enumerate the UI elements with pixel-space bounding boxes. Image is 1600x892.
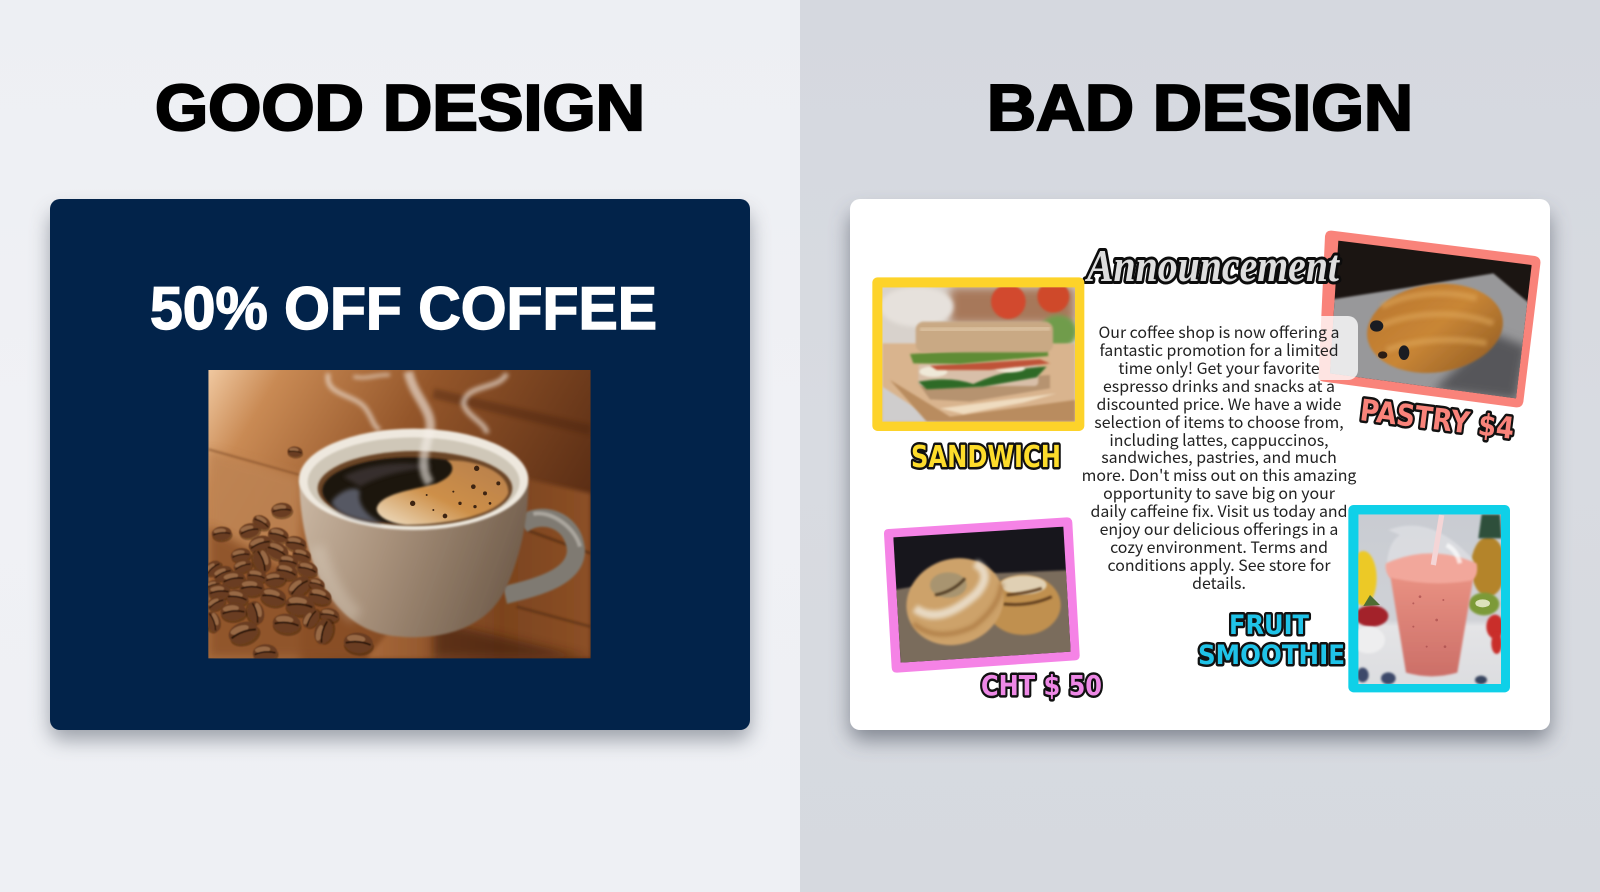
right background	[800, 0, 1600, 892]
label: fruit smoothie	[1198, 610, 1345, 671]
body copy paragraph: conditions apply. See store for	[1107, 553, 1331, 576]
heading: bad design: BAD DESIGN	[987, 71, 1413, 144]
panel shadow: good	[50, 212, 750, 740]
steam	[328, 372, 507, 483]
cup	[1389, 570, 1475, 676]
ad headline: 50% OFF COFFEE	[150, 275, 657, 342]
body copy paragraph: including lattes, cappuccinos,	[1109, 428, 1329, 451]
handle	[505, 518, 576, 595]
body copy paragraph: more. Don't miss out on this amazing	[1082, 463, 1356, 486]
panel: good design ad	[50, 199, 750, 730]
photo: coffee cup on wood	[201, 370, 591, 665]
body copy paragraph: espresso drinks and snacks at a	[1103, 374, 1335, 397]
panel: bad design flyer	[850, 199, 1550, 730]
label: sandwich: SANDWICH	[911, 440, 1061, 475]
body copy paragraph: fantastic promotion for a limited	[1099, 338, 1339, 361]
coffee beans	[201, 446, 375, 665]
label: fruit smoothie: FRUIT	[1229, 610, 1310, 641]
photo frame: sandwich (yellow)	[872, 277, 1084, 431]
body copy paragraph: sandwiches, pastries, and much	[1101, 445, 1337, 468]
body copy paragraph	[1082, 320, 1356, 594]
heading: good design: GOOD DESIGN	[155, 71, 645, 144]
left background	[0, 0, 800, 892]
photo frame: cinnamon rolls (pink)	[884, 517, 1080, 673]
body copy paragraph: details.	[1192, 571, 1246, 594]
body copy paragraph: Our coffee shop is now offering a	[1099, 320, 1339, 343]
panel shadow: bad	[850, 212, 1550, 740]
body copy paragraph: cozy environment. Terms and	[1110, 535, 1328, 558]
body copy paragraph: daily caffeine fix. Visit us today and	[1091, 499, 1347, 522]
body copy paragraph: time only! Get your favorite	[1118, 356, 1320, 379]
body copy paragraph: enjoy our delicious offerings in a	[1100, 517, 1338, 540]
body copy paragraph: selection of items to choose from,	[1094, 410, 1344, 433]
label: cinnamon roll price: CHT $ 50	[981, 669, 1102, 702]
label: fruit smoothie: SMOOTHIE	[1198, 640, 1345, 671]
announcement heading: Announcement	[1084, 240, 1340, 291]
body copy paragraph: discounted price. We have a wide	[1097, 392, 1342, 415]
body copy paragraph: opportunity to save big on your	[1103, 481, 1336, 504]
photo frame: pastry (coral)	[1318, 231, 1540, 407]
label: pastry price: PASTRY $4	[1358, 393, 1516, 447]
cup	[299, 480, 528, 637]
translucent text box overlap	[1100, 316, 1358, 380]
photo frame: smoothie (cyan)	[1348, 505, 1510, 692]
